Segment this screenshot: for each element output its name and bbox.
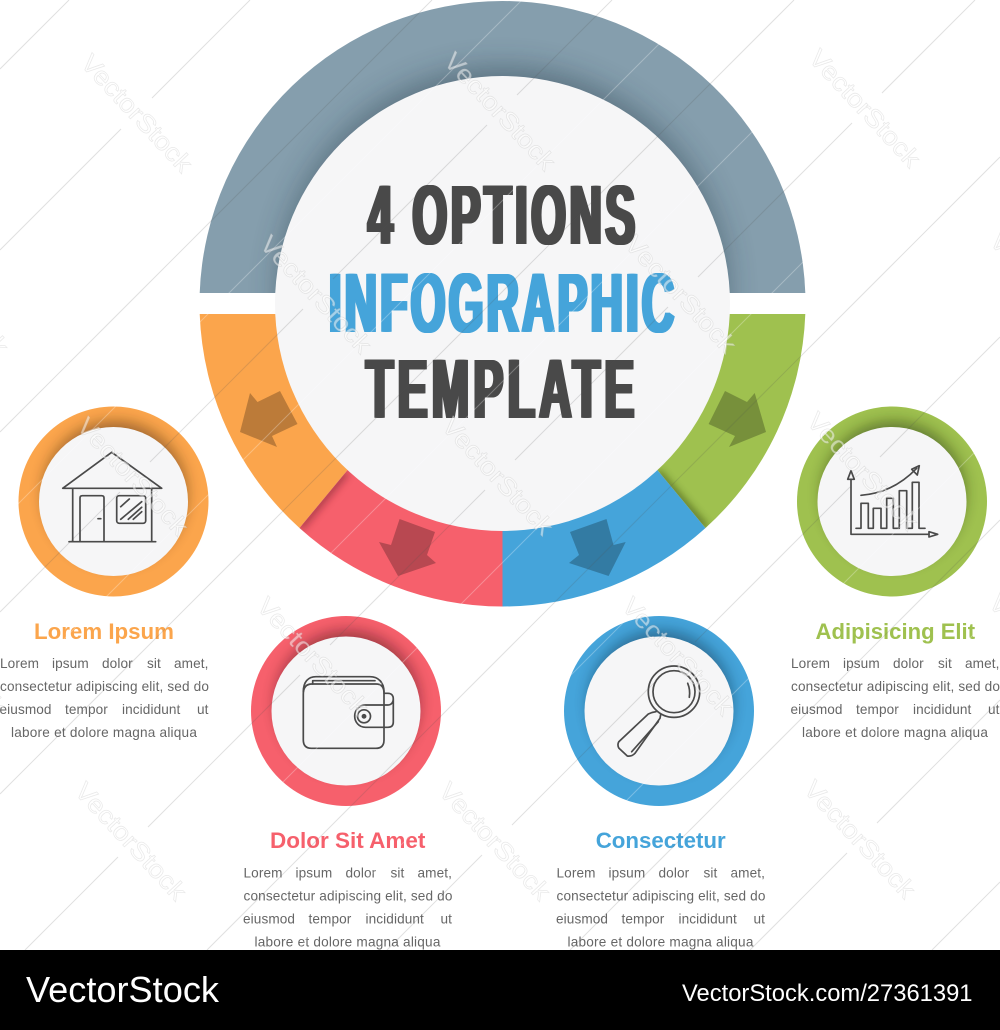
body text (556, 866, 766, 950)
body text: amet, (418, 866, 452, 880)
body text: ipsum (608, 866, 645, 880)
watermarks: VectorStock (438, 47, 561, 176)
body text: Lorem (244, 866, 283, 880)
body text: ipsum (296, 866, 332, 880)
body text: sit (390, 866, 405, 880)
watermarks: VectorStock (616, 592, 739, 721)
body text: consectetur adipiscing elit, sed do (244, 888, 452, 904)
option 4: green (790, 406, 1000, 740)
body text: incididunt (366, 912, 424, 926)
body text: dolor (658, 866, 690, 880)
heading: Consectetur (596, 828, 726, 853)
body text: consectetur adipiscing elit, sed do (791, 679, 1000, 694)
body text: ut (754, 912, 765, 926)
body text: labore et dolore magna aliqua (802, 725, 988, 740)
title line 3: TEMPLATE (366, 343, 634, 437)
watermarks: VectorStock (803, 44, 926, 173)
watermarks: VectorStock (71, 412, 194, 541)
body text: tempor (856, 702, 899, 717)
icon: wallet (303, 677, 393, 748)
arrow: blue (569, 519, 626, 576)
red segment (300, 455, 502, 606)
watermarks: VectorStock (69, 777, 192, 906)
body text: incididunt (122, 702, 181, 717)
body text: incididunt (913, 702, 972, 717)
footer url: VectorStock.com/27361391 (682, 980, 972, 1007)
icon: house (63, 452, 162, 542)
body text: ipsum (843, 656, 880, 671)
body text: ut (988, 702, 1000, 717)
title (329, 169, 674, 437)
body text: dolor (893, 656, 924, 671)
watermarks: VectorStock (619, 230, 742, 359)
green ring (797, 406, 987, 596)
arrow: orange (240, 391, 298, 447)
body text: eiusmod (0, 702, 52, 717)
body text: tempor (622, 912, 665, 926)
title line 1: 4 OPTIONS (368, 169, 635, 263)
orange segment (200, 314, 360, 528)
heading: Dolor Sit Amet (270, 828, 426, 853)
body text (0, 656, 209, 740)
body text: labore et dolore magna aliqua (568, 934, 754, 950)
body text (243, 866, 452, 950)
body text: ut (197, 702, 209, 717)
icon: magnifying glass (618, 666, 700, 756)
watermarks: VectorStock (801, 407, 924, 536)
main segmented ring (200, 1, 805, 606)
body text: ut (440, 912, 452, 926)
body text: labore et dolore magna aliqua (11, 725, 197, 740)
footer logo: VectorStock (26, 969, 220, 1010)
body text: Lorem (556, 866, 596, 880)
option 1: orange (0, 406, 209, 740)
option 3: blue (556, 616, 766, 950)
green segment (645, 314, 805, 528)
body text: tempor (65, 702, 108, 717)
body text: sit (147, 656, 161, 671)
body text: amet, (174, 656, 208, 671)
body text: eiusmod (556, 912, 608, 926)
top slate arc (200, 1, 806, 293)
watermarks: VectorStock (254, 230, 377, 359)
heading: Adipisicing Elit (816, 619, 976, 644)
blue segment (502, 455, 706, 606)
body text: amet, (965, 656, 1000, 671)
body text: labore et dolore magna aliqua (254, 934, 441, 950)
watermarks: VectorStock (433, 777, 556, 906)
title line 2: INFOGRAPHIC (329, 257, 674, 351)
body text: consectetur adipiscing elit, sed do (0, 679, 209, 694)
arrow: red (379, 519, 436, 576)
option 2: red (243, 616, 452, 950)
footer bar (0, 950, 1000, 1030)
watermarks: VectorStock (798, 775, 921, 904)
body text (790, 656, 1000, 740)
watermarks: VectorStock (251, 592, 374, 721)
central circle (275, 76, 730, 531)
arrow: green (709, 391, 766, 447)
red ring (251, 616, 441, 806)
body text: Lorem (0, 656, 39, 671)
icon: growth chart (848, 466, 938, 537)
body text: incididunt (678, 912, 737, 926)
heading: Lorem Ipsum (34, 619, 174, 644)
watermarks: VectorStock (75, 49, 198, 178)
body text: amet, (730, 866, 765, 880)
orange ring (18, 406, 208, 596)
watermarks: VectorStock (436, 412, 559, 541)
body text: dolor (346, 866, 377, 880)
body text: sit (938, 656, 952, 671)
body text: eiusmod (790, 702, 843, 717)
body text: dolor (102, 656, 133, 671)
body text: Lorem (791, 656, 830, 671)
body text: consectetur adipiscing elit, sed do (556, 888, 766, 904)
blue ring (564, 616, 754, 806)
body text: ipsum (52, 656, 89, 671)
body text: eiusmod (243, 912, 295, 926)
body text: tempor (308, 912, 352, 926)
body text: sit (704, 866, 718, 880)
